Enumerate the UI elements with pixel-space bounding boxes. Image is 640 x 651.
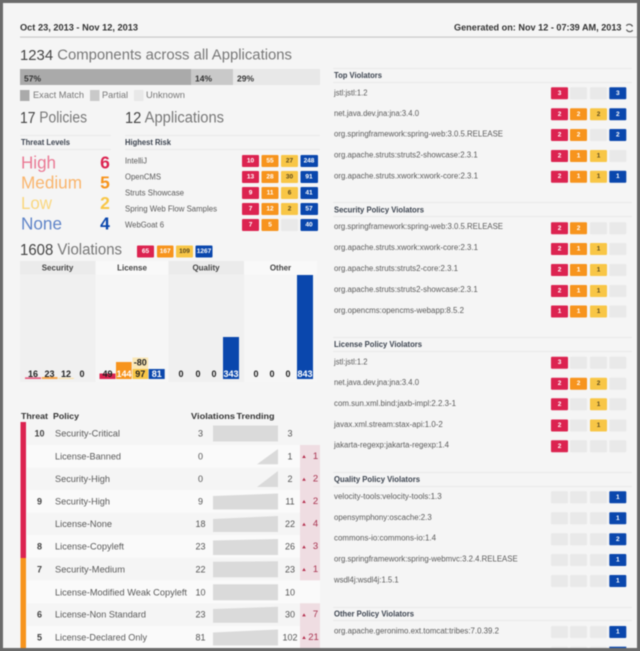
row: Security-High: Security-High <box>55 474 110 484</box>
violator row <box>334 129 626 141</box>
violator row: 1 <box>616 578 620 584</box>
app row: Spring Web Flow Samples <box>125 203 318 215</box>
violator row: 2 <box>558 132 562 138</box>
row: License-None: License-None <box>55 519 112 529</box>
components heading: 1234 Components across all Applications <box>20 46 292 64</box>
panel: threat levels: None <box>21 214 62 234</box>
violator row: org.opencms:opencms-webapp:8.5.2 <box>334 306 465 315</box>
violator row: 3 <box>616 90 620 97</box>
violator row: org.apache.struts:struts2-core:2.3.1 <box>334 264 459 273</box>
violator row: org.apache.struts:struts2-showcase:2.3.1 <box>334 150 478 160</box>
panel: quality policy violators <box>333 472 632 587</box>
row: License-Declared Only: 81 <box>195 632 206 642</box>
security policy violators heading: Security Policy Violators <box>334 206 425 214</box>
violator row: 2 <box>616 111 620 118</box>
row: Security-Critical: Security-Critical <box>55 428 120 438</box>
app row: IntelliJ: 10 <box>247 158 254 164</box>
violator row: org.springframework:spring-web:3.0.5.RELEASE <box>334 130 503 138</box>
violator row <box>333 87 626 99</box>
column: Security: 0 <box>79 369 85 379</box>
row: License-Declared Only: 21 <box>308 632 319 643</box>
row: Security-Medium: 7 <box>37 564 42 574</box>
violator row: jstl:jstl:1.2 <box>333 358 368 366</box>
app row: Spring Web Flow Samples: Spring Web Flow Samples <box>125 204 217 214</box>
violator row <box>334 264 626 276</box>
app row: OpenCMS: 13 <box>247 174 254 180</box>
violator row: 1 <box>558 308 562 315</box>
column: Other: 843 <box>297 369 313 379</box>
column: Other: 0 <box>269 369 275 379</box>
stacked bar: component match: 14% <box>195 74 212 84</box>
violator row <box>334 243 626 255</box>
legend: Exact Match <box>33 90 84 101</box>
column: Security: 16 <box>28 369 38 379</box>
violator row <box>334 554 626 566</box>
violator row: 1 <box>616 515 620 522</box>
legend: Unknown <box>146 90 185 101</box>
app row: IntelliJ: 248 <box>304 158 315 164</box>
row: Security-Critical <box>34 426 293 442</box>
violator row <box>333 575 626 587</box>
column: Quality: 0 <box>195 369 201 379</box>
row: License-Banned: 1 <box>313 451 318 462</box>
license policy violators heading: License Policy Violators <box>334 340 423 349</box>
row: License-Declared Only: 102 <box>282 632 298 642</box>
panel: threat levels: 5 <box>100 172 110 192</box>
row: Security-High 9: 11 <box>285 496 295 506</box>
violator row <box>333 440 626 452</box>
violator row: org.springframework:spring-web:3.0.5.RELEASE <box>334 222 503 231</box>
violator row: 2 <box>597 380 601 387</box>
column: Other <box>253 263 313 379</box>
app row: IntelliJ: IntelliJ <box>125 156 147 166</box>
row: Security-High: 2 <box>313 474 318 484</box>
app row: Struts Showcase: 11 <box>267 190 274 196</box>
column: Other: 0 <box>253 369 259 379</box>
violator row: 2 <box>558 288 562 294</box>
violator row: org.apache.geronimo.ext.tomcat:tribes:7.0.39.2 <box>334 626 500 636</box>
violator row: 1 <box>577 308 581 315</box>
violator row: 1 <box>577 246 581 252</box>
panel: threat levels: 4 <box>100 214 110 234</box>
violator row: net.java.dev.jna:jna:3.4.0 <box>334 378 420 387</box>
panel: other policy violators <box>333 608 632 648</box>
app row: Struts Showcase <box>125 187 318 199</box>
violator row: jakarta-regexp:jakarta-regexp:1.4 <box>333 440 450 450</box>
violator row: wsdl4j:wsdl4j:1.5.1 <box>333 576 399 584</box>
column: Quality: 0 <box>211 369 217 379</box>
app row: Struts Showcase: 41 <box>305 190 313 196</box>
violator row: 1 <box>577 173 581 180</box>
violator row: 2 <box>558 422 562 429</box>
column: Quality <box>178 263 239 379</box>
app row: OpenCMS: OpenCMS <box>125 172 161 182</box>
row: License-Copyleft: 26 <box>285 542 295 552</box>
violator row <box>334 285 626 297</box>
app row: WebGoat 6: 5 <box>268 222 272 228</box>
column: License: 144 <box>116 369 132 379</box>
violator row <box>334 150 626 162</box>
row: License-Banned <box>55 449 318 464</box>
app row: IntelliJ: 27 <box>286 158 293 164</box>
app row: Struts Showcase: 9 <box>249 190 253 196</box>
legend: Partial <box>102 90 128 101</box>
trend delta column <box>300 445 320 648</box>
violator row: 1 <box>616 628 620 636</box>
row: License-Copyleft: 8 <box>37 542 42 552</box>
row: Security-High <box>55 471 318 487</box>
violator row <box>334 398 626 410</box>
panel: highest risk applications <box>125 136 320 231</box>
violator row: opensymphony:oscache:2.3 <box>334 513 432 522</box>
violator row <box>334 306 626 318</box>
violator row <box>334 108 626 120</box>
violator row: 1 <box>577 266 581 274</box>
row: License-Non Standard: 7 <box>313 609 318 620</box>
row: License-Modified Weak Copyleft <box>55 584 295 600</box>
violator row: jstl:jstl:1.2 <box>333 88 368 98</box>
row: Security-Critical: 10 <box>34 428 45 438</box>
violator row: net.java.dev.jna:jna:3.4.0 <box>334 109 420 118</box>
violator row <box>334 222 626 234</box>
applications heading: 12 Applications <box>125 110 224 126</box>
violator row: 1 <box>616 173 620 180</box>
icon: refresh <box>626 24 633 32</box>
violator row <box>334 512 626 524</box>
row: License-Non Standard <box>37 607 318 623</box>
app row: WebGoat 6: 7 <box>249 222 253 228</box>
row: Security-High 9: 9 <box>37 496 42 506</box>
violations totals badges: 65 <box>142 248 149 255</box>
row: License-Modified Weak Copyleft: 10 <box>195 587 206 597</box>
policies heading: 17 Policies <box>20 110 87 126</box>
table header: Violations <box>191 411 235 421</box>
violator row: 1 <box>597 401 601 408</box>
row: License-Modified Weak Copyleft: License-Modified Weak Copyleft <box>55 587 188 597</box>
column: License <box>100 263 165 379</box>
violator row: 2 <box>577 380 581 387</box>
panel: threat levels: Medium <box>21 172 82 192</box>
violator row: 3 <box>558 90 562 97</box>
row: Security-Medium: Security-Medium <box>55 564 125 574</box>
row: Security-High 9: 2 <box>313 496 318 507</box>
clipped violator row badges <box>551 647 626 648</box>
violator row: 2 <box>558 225 562 232</box>
row: License-Non Standard: 30 <box>285 610 295 620</box>
app row: OpenCMS: 28 <box>266 174 274 180</box>
column: License: 81 <box>152 369 162 379</box>
panel: threat levels: Low <box>21 193 52 213</box>
app row: IntelliJ: 55 <box>266 158 274 164</box>
highest risk heading: Highest Risk <box>125 138 172 147</box>
violator row: 2 <box>577 132 581 138</box>
violator row: 1 <box>597 308 601 315</box>
violator row: 2 <box>616 132 620 138</box>
app row: Spring Web Flow Samples: 12 <box>266 206 274 212</box>
row: Security-High 9: 9 <box>198 496 203 506</box>
violator row: 1 <box>616 494 620 501</box>
legend <box>20 90 185 101</box>
violator row: 1 <box>577 152 581 160</box>
row: Security-Medium <box>37 561 318 577</box>
violations totals badges: 1267 <box>197 248 212 255</box>
violator row: 2 <box>577 225 581 232</box>
violator row: 2 <box>558 266 562 274</box>
app row: WebGoat 6: WebGoat 6 <box>125 220 165 230</box>
column: License: 49 <box>102 369 113 379</box>
app row: OpenCMS <box>125 171 318 183</box>
violator row: 1 <box>597 173 601 180</box>
row: Security-Critical: 3 <box>287 428 293 438</box>
row: Security-Medium: 23 <box>285 564 295 574</box>
app row: IntelliJ <box>125 155 318 167</box>
table header: Threat <box>21 411 48 421</box>
violator row: 2 <box>597 111 601 118</box>
policy table <box>20 411 320 648</box>
row: License-Non Standard: 6 <box>37 610 42 620</box>
violations heading: 1608 Violations <box>20 242 122 258</box>
violator row: 1 <box>597 246 601 252</box>
column: Security: Security <box>42 263 74 272</box>
violator row: org.apache.struts.xwork:xwork-core:2.3.1 <box>334 171 479 180</box>
violator row: org.apache.struts.xwork:xwork-core:2.3.1 <box>334 243 479 252</box>
row: License-Non Standard: License-Non Standard <box>55 610 146 620</box>
row: Security-High 9: Security-High <box>55 496 110 506</box>
row: License-Declared Only <box>37 630 319 646</box>
violator row <box>333 357 626 369</box>
row: License-Non Standard: 23 <box>195 610 206 620</box>
column: Quality: 0 <box>178 369 184 379</box>
violator row: velocity-tools:velocity-tools:1.3 <box>334 492 442 501</box>
panel: threat levels: 2 <box>100 193 110 213</box>
column: License: License <box>117 263 147 272</box>
violator row <box>334 378 626 390</box>
app row: WebGoat 6: 40 <box>305 222 313 228</box>
other policy violators heading: Other Policy Violators <box>334 610 415 618</box>
row: License-None: 4 <box>313 518 318 530</box>
violator row: 2 <box>558 443 562 450</box>
row: License-Banned: 1 <box>287 451 293 461</box>
violator row: 1 <box>597 266 601 274</box>
violator row <box>334 491 626 503</box>
violator row: javax.xml.stream:stax-api:1.0-2 <box>333 420 443 429</box>
panel: security policy violators <box>333 202 632 318</box>
app row: OpenCMS: 30 <box>286 174 293 180</box>
row: Security-High: 0 <box>198 474 203 484</box>
row: License-None <box>55 516 318 532</box>
quality policy violators heading: Quality Policy Violators <box>334 475 421 484</box>
violator row: org.apache.struts:struts2-showcase:2.3.1 <box>334 285 478 294</box>
violator row: 3 <box>558 359 562 366</box>
row: Security-Medium: 22 <box>195 564 206 574</box>
threat levels heading: Threat Levels <box>21 138 71 147</box>
stacked bar: component match: 57% <box>24 74 41 84</box>
row: Security-High 9 <box>37 494 318 510</box>
top violators heading: Top Violators <box>334 71 383 80</box>
row: License-Copyleft <box>37 539 318 555</box>
violations totals badges: 109 <box>179 248 190 255</box>
column: Quality: 343 <box>223 369 239 379</box>
violator row: 2 <box>577 111 581 118</box>
column: License: -80 <box>134 358 147 368</box>
bar chart: violations by category <box>20 261 317 382</box>
violator row: com.sun.xml.bind:jaxb-impl:2.2.3-1 <box>334 399 457 408</box>
row: License-Copyleft: 23 <box>195 542 206 552</box>
violator row: 2 <box>558 111 562 118</box>
violator row: org.springframework:spring-webmvc:3.2.4.RELEASE <box>334 554 518 564</box>
column: Other: 0 <box>285 369 291 379</box>
column: Security: 12 <box>61 369 71 379</box>
app row: Struts Showcase: Struts Showcase <box>125 188 185 198</box>
report header <box>20 22 637 38</box>
violator row <box>334 171 626 183</box>
column: Quality: Quality <box>192 263 220 272</box>
app row: Struts Showcase: 6 <box>288 190 292 196</box>
row: License-Copyleft: 3 <box>313 541 318 552</box>
app row: WebGoat 6 <box>125 219 318 231</box>
column: Security <box>25 263 85 379</box>
app row: Spring Web Flow Samples: 7 <box>249 206 253 212</box>
violator row: 2 <box>558 401 562 408</box>
table header: Trending <box>236 411 274 421</box>
violator row: 1 <box>577 288 581 294</box>
violator row: 1 <box>597 288 601 294</box>
violator row <box>334 533 626 545</box>
violator row: 1 <box>597 152 601 160</box>
panel: threat levels: High <box>21 152 56 172</box>
row: License-Copyleft: License-Copyleft <box>55 542 125 552</box>
panel: threat levels: 6 <box>100 152 110 172</box>
row: License-Banned: 0 <box>198 451 203 461</box>
panel: license policy violators <box>333 338 632 452</box>
table header: Policy <box>53 411 79 421</box>
table header <box>21 411 274 421</box>
column: Other: Other <box>270 263 291 272</box>
row: License-None: 22 <box>285 519 295 529</box>
column: Security: 23 <box>44 369 55 379</box>
violations totals badges <box>137 246 212 258</box>
violator row: 2 <box>558 173 562 180</box>
app row: OpenCMS: 91 <box>305 174 313 180</box>
stacked bar: component match: 29% <box>237 74 254 84</box>
threat severity strip <box>20 422 26 648</box>
row: Security-Medium: 1 <box>313 564 318 575</box>
violations totals badges: 167 <box>160 248 171 255</box>
date range: Oct 23, 2013 - Nov 12, 2013 <box>20 22 138 34</box>
stacked bar: component match <box>20 69 320 85</box>
violator row <box>334 626 626 638</box>
violator row: 2 <box>558 152 562 160</box>
row: License-Declared Only: License-Declared Only <box>55 632 147 642</box>
generated on timestamp: Generated on: Nov 12 - 07:39 AM, 2013 <box>454 22 622 34</box>
violator row <box>333 420 626 432</box>
violator row: 2 <box>616 536 620 543</box>
panel: top violators <box>333 68 632 183</box>
app row: Spring Web Flow Samples: 57 <box>305 206 313 212</box>
row: Security-Critical: 3 <box>198 428 203 438</box>
app row: Spring Web Flow Samples: 2 <box>288 206 292 212</box>
row: License-Banned: License-Banned <box>55 451 121 461</box>
row: License-Modified Weak Copyleft: 10 <box>285 587 295 597</box>
violator row: commons-io:commons-io:1.4 <box>334 534 437 542</box>
row: Security-High: 2 <box>287 474 293 484</box>
violator row: 2 <box>558 246 562 252</box>
violator row: 2 <box>558 380 562 387</box>
violator row: 1 <box>597 422 601 429</box>
violator row: 1 <box>616 556 620 564</box>
row: License-None: 18 <box>195 519 206 529</box>
row: License-Declared Only: 5 <box>37 632 42 642</box>
panel: threat levels <box>20 136 111 234</box>
column: License: 97 <box>135 369 145 379</box>
